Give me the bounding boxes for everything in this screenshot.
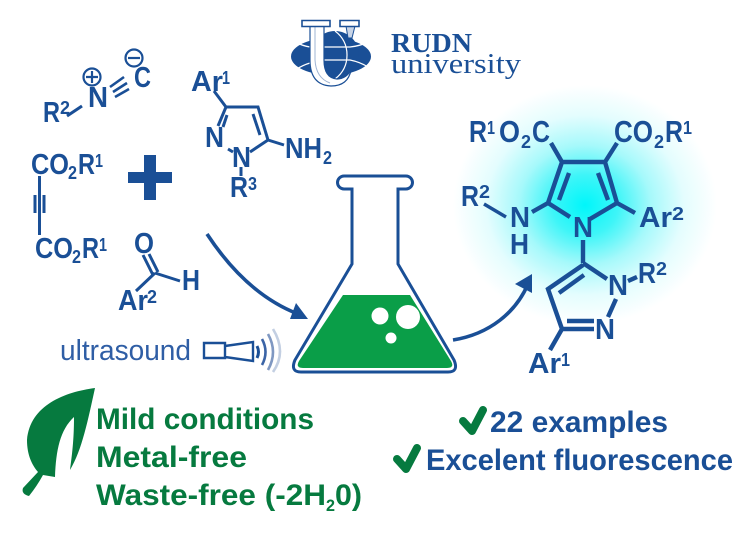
reagent: aminopyrazole: 1 <box>222 68 230 88</box>
ester group right: R <box>665 115 683 149</box>
ester group left: R <box>469 115 487 149</box>
pyrazole ring: N <box>608 270 628 302</box>
pyrazole ring: R <box>638 258 656 290</box>
logo wordmark: RUDN <box>391 28 473 58</box>
amine substituent <box>461 181 530 261</box>
fluorescence glow <box>453 85 717 325</box>
green conditions list: Metal-free <box>96 441 247 474</box>
amine substituent: 2 <box>479 182 490 202</box>
pyrazole ring: 2 <box>656 259 667 279</box>
icon: green leaf <box>23 388 95 496</box>
reagent: aminopyrazole: 2 <box>323 148 332 168</box>
pyrazole ring <box>528 258 667 380</box>
green conditions list: 0) <box>335 479 362 512</box>
flask liquid <box>298 295 452 368</box>
icon: ultrasound horn <box>204 329 280 372</box>
reagent: acetylene dicarboxylate: R <box>82 233 99 265</box>
product molecule <box>461 115 692 380</box>
arrow: reagents to flask <box>207 234 308 319</box>
logo wordmark <box>391 28 522 80</box>
reagent: acetylene dicarboxylate <box>31 149 107 267</box>
green conditions list: 2 <box>326 496 335 515</box>
amine substituent: N <box>510 202 530 234</box>
ester group left: 1 <box>487 118 495 138</box>
reagent: aldehyde: H <box>182 265 200 297</box>
pyrazole ring: Ar <box>528 348 561 380</box>
ultrasound label: ultrasound <box>60 335 191 367</box>
ester group right: 2 <box>654 132 664 152</box>
reagent: aminopyrazole: N <box>205 122 224 154</box>
ester group left <box>469 115 550 152</box>
reagent: isocyanide: N <box>88 82 108 114</box>
ester group right: 1 <box>683 118 692 138</box>
reagent: acetylene dicarboxylate: CO <box>35 233 73 265</box>
reagent: aminopyrazole <box>191 66 332 204</box>
reagent: isocyanide <box>43 50 151 129</box>
pyrrole ring bonds <box>532 143 635 263</box>
reagent: aminopyrazole: NH <box>285 133 322 165</box>
reagent: aminopyrazole: Ar <box>191 66 223 98</box>
reagent: isocyanide: C <box>134 62 151 94</box>
ester group left: 2 <box>521 132 531 152</box>
pyrazole ring: N <box>595 314 615 346</box>
green conditions list <box>96 403 362 515</box>
logo: RUDN university <box>291 20 522 86</box>
reagent: acetylene dicarboxylate: 1 <box>95 151 103 171</box>
amine substituent: R <box>461 181 479 213</box>
result: 22 examples: 22 examples <box>490 406 668 439</box>
reagent: acetylene dicarboxylate: 2 <box>72 247 81 267</box>
flask outline <box>293 176 456 372</box>
pyrazole ring: 1 <box>561 350 570 370</box>
ester group left: O <box>499 115 520 149</box>
reagent: acetylene dicarboxylate: CO <box>31 149 69 181</box>
reagent: acetylene dicarboxylate: R <box>78 149 95 181</box>
ester group right <box>614 115 692 152</box>
reagent: aldehyde: Ar <box>118 285 148 317</box>
ester group left: C <box>532 115 550 149</box>
reagent: isocyanide: R <box>43 97 60 129</box>
arrow: flask to product <box>453 274 532 340</box>
bubbles <box>372 305 420 344</box>
flask <box>293 176 456 372</box>
amine substituent: H <box>510 229 529 261</box>
ester group right: CO <box>614 115 653 149</box>
reagent: aminopyrazole: 3 <box>248 174 257 194</box>
reagent: acetylene dicarboxylate: 2 <box>68 163 77 183</box>
icon: check mark 1 <box>463 410 483 431</box>
pyrrole nitrogen: N <box>573 212 593 244</box>
reagent: aldehyde: O <box>134 228 154 260</box>
logo wordmark: university <box>391 48 522 80</box>
reagent: aminopyrazole: N <box>232 142 251 174</box>
aryl substituent: 2 <box>672 204 684 224</box>
reagent: acetylene dicarboxylate: 1 <box>99 235 107 255</box>
green conditions list: Waste-free (-2H <box>96 479 326 512</box>
aryl substituent: Ar <box>639 202 672 234</box>
reagent: aldehyde <box>118 228 200 317</box>
result: excellent fluorescence: Excelent fluorescence <box>426 444 733 477</box>
logo emblem: globe and U <box>291 20 371 86</box>
green conditions list: Mild conditions <box>96 403 314 436</box>
reagent: isocyanide: 2 <box>60 98 70 118</box>
reagent: aminopyrazole: R <box>230 172 248 204</box>
plus sign <box>128 155 172 200</box>
reagent: aldehyde: 2 <box>147 287 157 307</box>
icon: check mark 2 <box>397 448 417 469</box>
